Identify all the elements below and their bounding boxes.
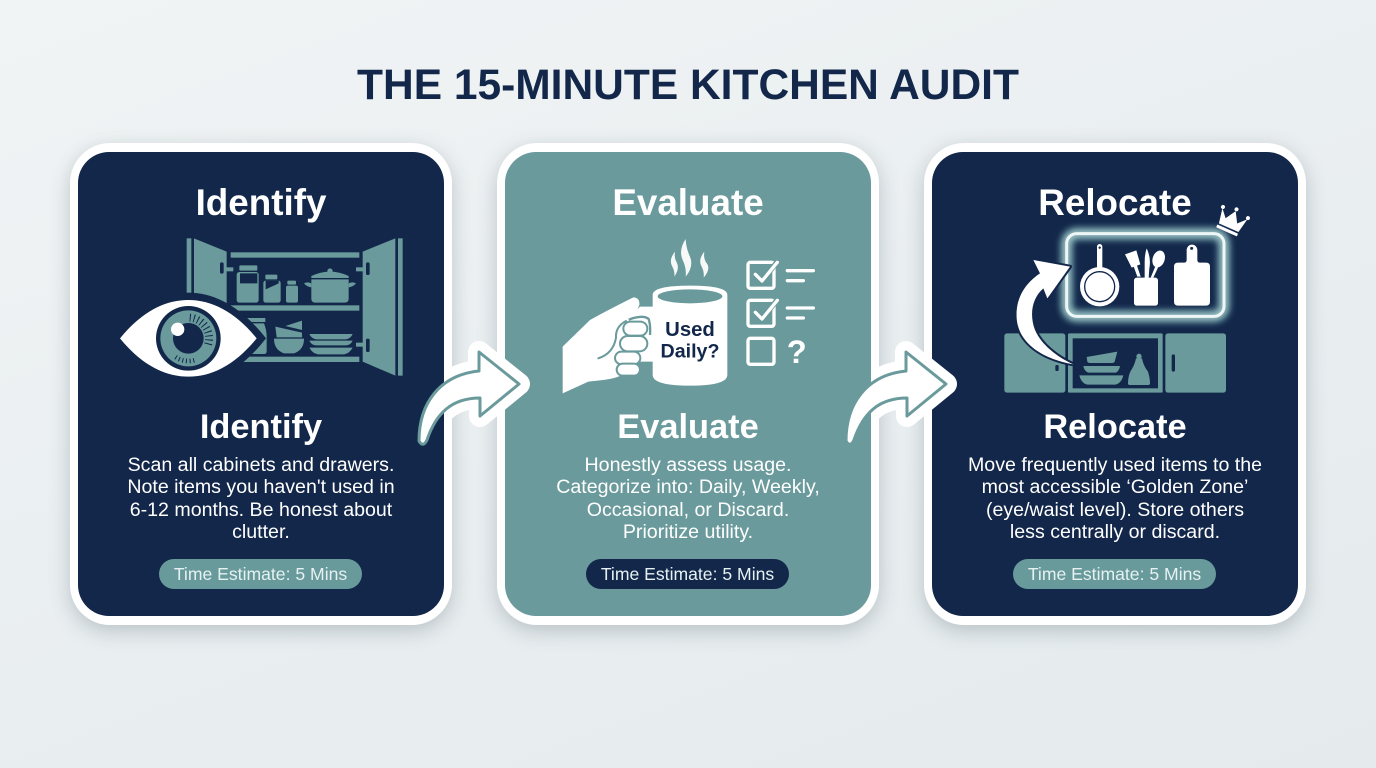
text block: identify description: Scan all cabinets and drawers. [128,454,394,476]
time estimate pill: Time Estimate: 5 Mins [174,564,347,584]
panel: relocate [924,143,1306,625]
time estimate pill [1013,559,1216,589]
text block: relocate description: (eye/waist level). Store others [986,499,1244,521]
text block: relocate description [968,454,1262,543]
heading: identify: Identify [196,182,326,223]
time estimate pill: Time Estimate: 5 Mins [1028,564,1201,584]
text block: relocate description: less centrally or discard. [1010,521,1220,543]
curved arrow [1017,260,1073,364]
heading: relocate: Relocate [1038,182,1192,223]
icon: relocate items to golden zone [1004,204,1250,393]
time estimate pill: Time Estimate: 5 Mins [601,564,774,584]
panel: evaluate [497,143,879,625]
arrow: evaluate to relocate [848,341,957,443]
icon: hand holding used daily mug with checklist [562,239,815,394]
mug: Daily? [660,341,720,363]
checklist [748,262,813,370]
frying pan [1080,244,1119,306]
arrow: identify to evaluate [418,341,530,446]
text block: evaluate description: Occasional, or Discard. [587,499,789,521]
text block: identify description: Note items you haven't used in [127,476,395,498]
text block: relocate description: Move frequently used items to the [968,454,1262,476]
cutting board [1174,245,1210,306]
icon: open cabinet with eye [120,238,403,377]
text block: evaluate description [556,454,820,543]
text block: evaluate description: Categorize into: Daily, Weekly, [556,476,820,498]
mug [627,286,727,386]
lower cabinets [1004,333,1226,393]
title: THE 15-MINUTE KITCHEN AUDIT [357,62,1019,109]
text block: evaluate description: Prioritize utility. [623,521,753,543]
checklist: ? [787,333,807,370]
golden zone glowing frame [1067,234,1224,316]
text block: identify description [127,454,395,543]
text block: relocate description: most accessible ‘Golden Zone’ [982,476,1248,498]
eye [111,293,266,384]
text block: identify description: clutter. [232,521,290,543]
mug: Used [665,319,715,341]
text block: identify description: 6-12 months. Be honest about [130,499,392,521]
panel: identify [70,143,452,625]
utensils in holder [1125,248,1167,306]
hand [563,297,650,393]
heading: evaluate: Evaluate [612,182,764,223]
subheading: identify: Identify [200,408,322,446]
subheading: evaluate: Evaluate [617,408,759,446]
subheading: relocate: Relocate [1043,408,1187,446]
steam [671,239,708,278]
time estimate pill [159,559,362,589]
time estimate pill [586,559,789,589]
crown [1212,201,1252,238]
text block: evaluate description: Honestly assess usage. [585,454,791,476]
